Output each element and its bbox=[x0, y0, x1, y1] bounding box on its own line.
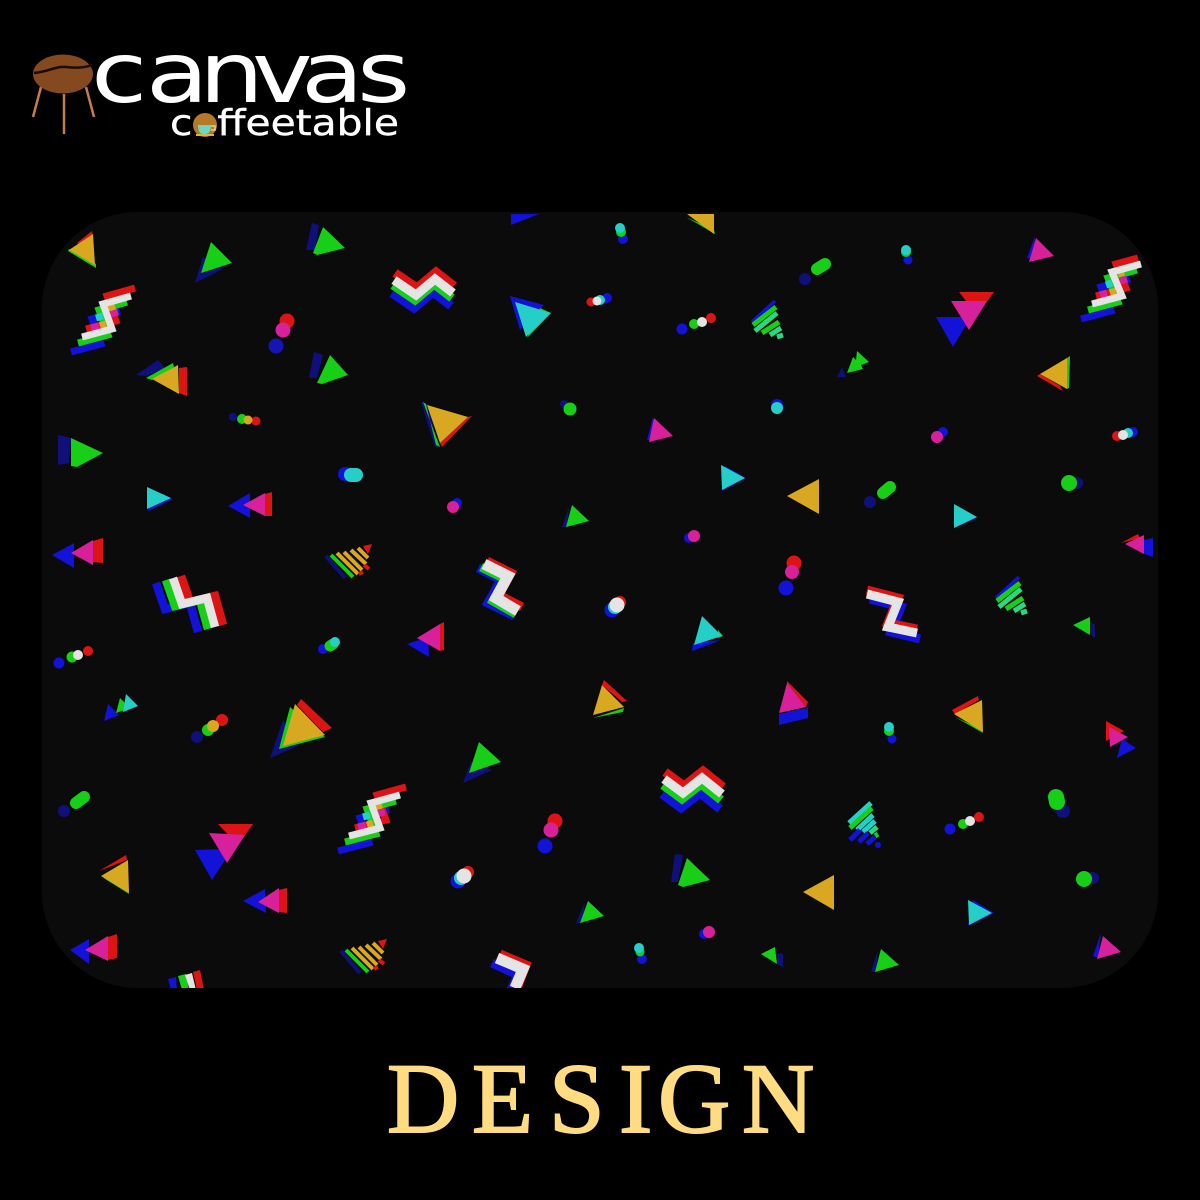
dots bbox=[931, 427, 948, 443]
triangle bbox=[1027, 236, 1054, 262]
triangle bbox=[692, 616, 723, 651]
pattern: scattered shapes bbox=[52, 214, 1153, 994]
icon: coffee bean table bbox=[33, 54, 94, 134]
dots bbox=[676, 313, 716, 334]
triangle bbox=[306, 223, 345, 255]
dots bbox=[58, 797, 84, 817]
zigzag bbox=[478, 561, 522, 616]
dots bbox=[778, 556, 802, 596]
triangle bbox=[647, 417, 673, 442]
triangle bbox=[68, 231, 96, 268]
striped triangle bbox=[326, 544, 372, 578]
triangles bbox=[104, 694, 138, 721]
triangles bbox=[52, 538, 103, 568]
zigzag bbox=[662, 771, 723, 809]
triangle bbox=[195, 242, 232, 283]
dots bbox=[684, 530, 700, 543]
dots bbox=[1112, 427, 1138, 441]
triangle bbox=[421, 402, 472, 447]
dots bbox=[634, 943, 647, 964]
striped triangle bbox=[849, 803, 881, 848]
triangle bbox=[1073, 617, 1095, 638]
dots bbox=[191, 714, 228, 743]
triangle bbox=[510, 296, 551, 338]
triangle bbox=[952, 696, 983, 733]
dots bbox=[604, 596, 626, 618]
triangle bbox=[1093, 933, 1121, 959]
triangles bbox=[195, 824, 253, 880]
zigzag bbox=[338, 787, 406, 851]
triangle bbox=[871, 949, 899, 972]
heading: DESIGN: DESIGN bbox=[387, 1043, 814, 1154]
dots bbox=[1056, 797, 1070, 818]
dots bbox=[884, 722, 896, 744]
triangle bbox=[58, 435, 103, 467]
dots bbox=[447, 498, 462, 513]
triangle bbox=[779, 681, 808, 725]
triangles bbox=[70, 934, 117, 964]
triangle bbox=[147, 487, 173, 511]
triangle bbox=[99, 855, 129, 894]
dots bbox=[699, 926, 715, 939]
arrow triangle bbox=[837, 351, 869, 377]
triangle bbox=[407, 622, 444, 657]
panel: placemat bbox=[42, 212, 1158, 994]
dots bbox=[944, 812, 984, 834]
dots bbox=[268, 314, 294, 354]
dots bbox=[538, 814, 562, 854]
triangle bbox=[686, 214, 715, 234]
zigzag bbox=[1081, 258, 1141, 319]
striped triangle bbox=[752, 301, 783, 337]
dots bbox=[560, 400, 576, 416]
triangle bbox=[309, 352, 348, 384]
logo wordmark: coffeetable: coffeetable bbox=[170, 103, 399, 144]
zigzag bbox=[492, 954, 526, 994]
triangle bbox=[270, 699, 332, 758]
dots bbox=[864, 487, 890, 508]
triangle bbox=[511, 214, 539, 225]
dots bbox=[338, 467, 356, 481]
dots bbox=[1061, 475, 1083, 491]
dots bbox=[54, 646, 93, 668]
zigzag bbox=[156, 576, 223, 632]
dots bbox=[901, 245, 912, 264]
dots bbox=[450, 866, 474, 888]
triangle bbox=[576, 901, 604, 923]
triangles bbox=[1106, 721, 1136, 758]
triangle bbox=[136, 360, 187, 396]
triangles bbox=[1121, 534, 1153, 557]
dots bbox=[615, 223, 628, 244]
logo: canvas coffeetable bbox=[33, 25, 410, 144]
logo wordmark: canvas: canvas bbox=[91, 25, 410, 123]
dots bbox=[799, 264, 825, 285]
triangle bbox=[761, 947, 783, 967]
dots bbox=[1076, 871, 1099, 887]
striped triangle bbox=[996, 577, 1027, 613]
triangles bbox=[936, 292, 994, 347]
triangles bbox=[228, 492, 272, 518]
striped triangle bbox=[341, 939, 387, 973]
zigzag bbox=[867, 590, 920, 639]
triangle bbox=[593, 680, 627, 718]
dots bbox=[586, 293, 612, 306]
dots bbox=[771, 399, 783, 414]
triangle bbox=[562, 505, 589, 527]
dots bbox=[229, 413, 260, 426]
triangle bbox=[1037, 356, 1070, 391]
triangle bbox=[954, 504, 979, 528]
zigzag bbox=[168, 970, 204, 990]
zigzag bbox=[392, 272, 454, 308]
triangle bbox=[803, 875, 834, 910]
icon: coffee cup bbox=[193, 113, 217, 137]
triangles bbox=[243, 888, 287, 913]
triangle bbox=[671, 854, 710, 887]
triangle bbox=[787, 479, 819, 514]
triangle bbox=[721, 465, 746, 491]
triangle bbox=[463, 742, 501, 783]
triangle bbox=[968, 900, 994, 926]
dots bbox=[318, 637, 340, 654]
zigzag bbox=[71, 288, 135, 352]
